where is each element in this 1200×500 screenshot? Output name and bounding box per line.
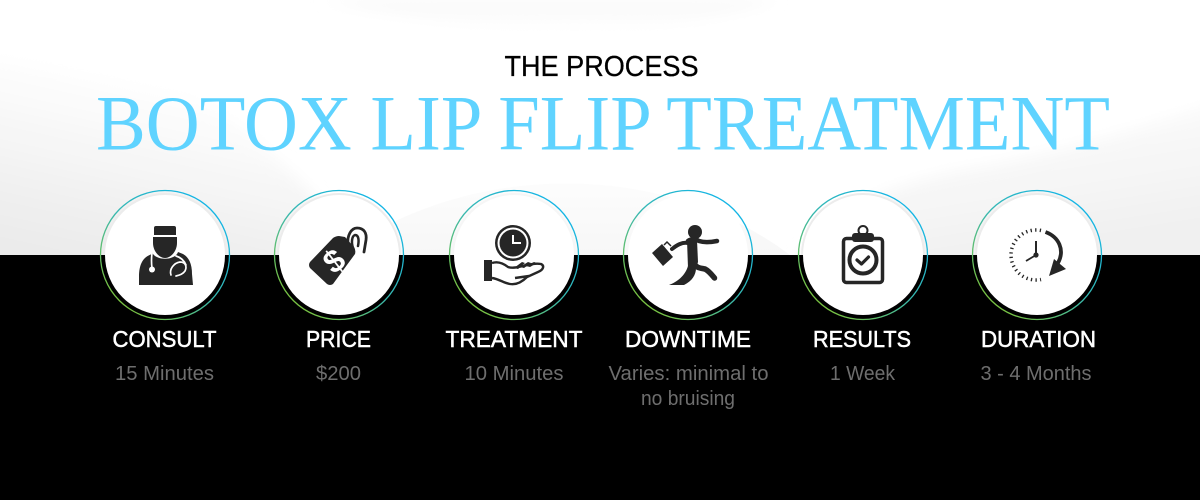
value: 15 minutes: 15 Minutes	[115, 363, 214, 385]
value: 1 week: 1 Week	[830, 363, 896, 385]
title: BOTOX LIP FLIP TREATMENT	[96, 80, 1110, 166]
label: duration: DURATION	[981, 326, 1096, 352]
label: consult: CONSULT	[112, 326, 216, 352]
icon: doctor	[139, 226, 193, 285]
value: $200: $200	[316, 363, 361, 385]
value: varies minimal to no bruising	[608, 363, 768, 410]
badge: results	[798, 190, 928, 320]
badge: treatment	[450, 190, 578, 320]
value: 3 - 4 months: 3 - 4 Months	[980, 363, 1092, 385]
subtitle: the process: THE PROCESS	[504, 51, 698, 83]
badge: duration	[972, 190, 1102, 320]
badge: price	[274, 190, 404, 320]
step: consult	[100, 190, 230, 385]
label: downtime: DOWNTIME	[625, 326, 751, 352]
value: varies minimal to no bruising: no bruising	[641, 388, 735, 410]
icon: price tag: $	[316, 241, 352, 281]
step: downtime	[608, 190, 768, 410]
value: varies minimal to no bruising: Varies: minimal to	[608, 363, 768, 385]
badge: consult	[100, 190, 230, 320]
badge: downtime	[624, 190, 752, 320]
label: price: PRICE	[306, 326, 371, 352]
label: treatment: TREATMENT	[446, 326, 582, 352]
value: 10 minutes: 10 Minutes	[464, 363, 564, 385]
step: duration	[972, 190, 1102, 385]
step: results	[798, 190, 928, 385]
step: price	[274, 190, 404, 385]
icon: clock over hand	[484, 225, 543, 284]
step: treatment	[446, 190, 582, 385]
icon: clock with arrow	[1011, 230, 1066, 280]
icon: clipboard with check	[844, 226, 882, 282]
label: results: RESULTS	[813, 326, 911, 352]
icon: running man with briefcase	[652, 225, 717, 285]
